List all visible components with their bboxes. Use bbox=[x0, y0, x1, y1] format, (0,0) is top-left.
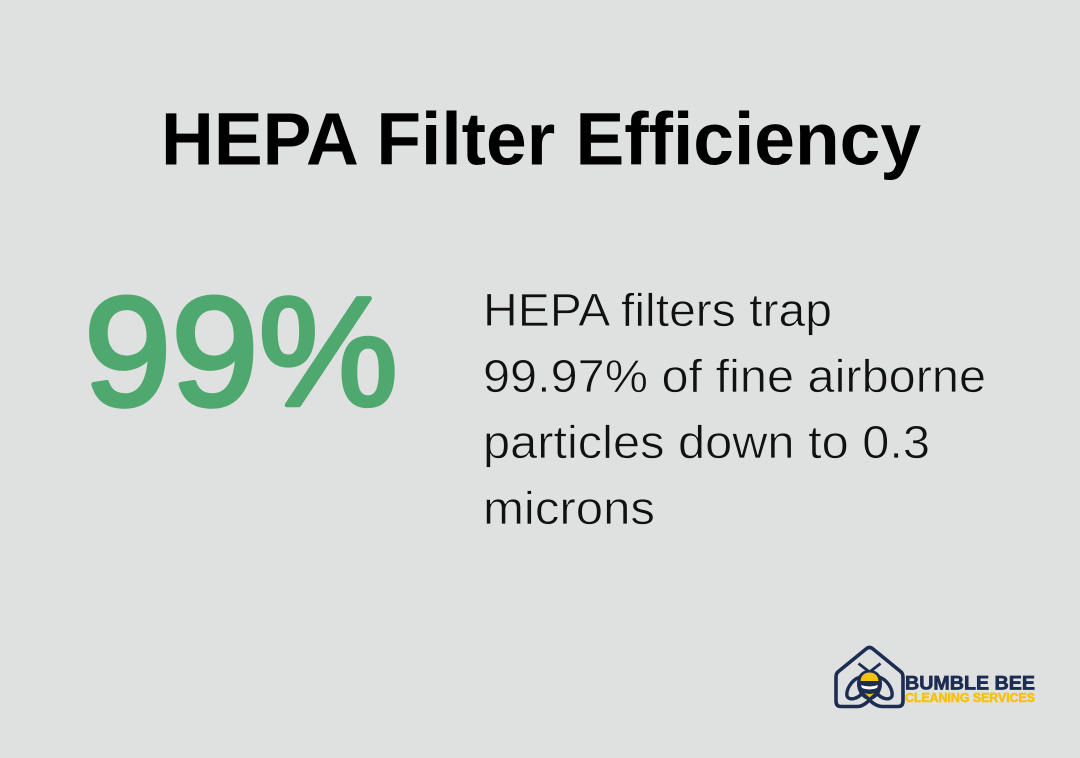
description text: microns bbox=[483, 482, 655, 534]
description text: HEPA filters trap bbox=[483, 284, 832, 336]
description text: particles down to 0.3 bbox=[483, 416, 930, 468]
icon: house with bee bbox=[836, 648, 903, 706]
title: HEPA Filter Efficiency bbox=[161, 98, 921, 180]
description text bbox=[483, 284, 986, 534]
description text: 99.97% of fine airborne bbox=[483, 350, 986, 402]
logo: Bumble Bee Cleaning Services bbox=[836, 648, 1035, 706]
big stat: 99%: 99% bbox=[84, 265, 398, 438]
brand tagline: CLEANING SERVICES bbox=[905, 691, 1035, 705]
brand name: BUMBLE BEE bbox=[905, 674, 1035, 694]
